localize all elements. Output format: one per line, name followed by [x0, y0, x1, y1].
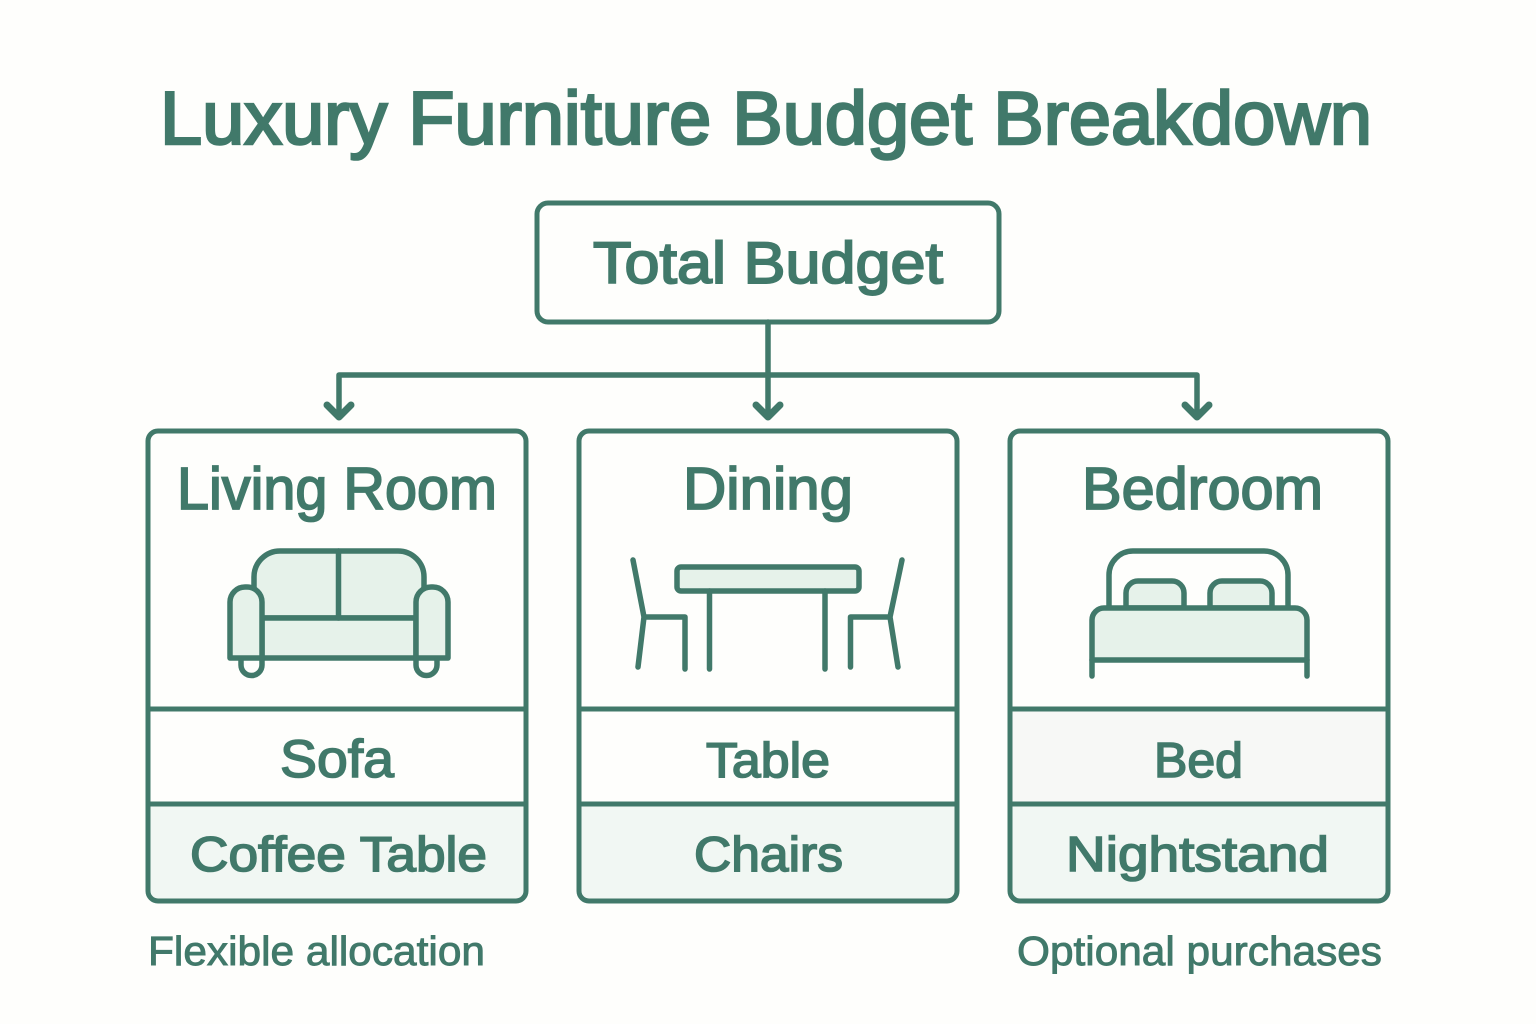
title: Luxury Furniture Budget Breakdown	[160, 76, 1372, 160]
item: coffee table: Coffee Table	[190, 828, 487, 882]
heading: bedroom: Bedroom	[1082, 456, 1323, 522]
note: optional purchases: Optional purchases	[1017, 928, 1382, 974]
item: table: Table	[706, 734, 830, 788]
panel: living room	[148, 431, 526, 901]
heading: dining: Dining	[683, 456, 853, 522]
panel: bedroom	[1010, 431, 1388, 901]
note: flexible allocation: Flexible allocation	[148, 928, 485, 974]
icon: table and chairs	[633, 560, 902, 669]
item: sofa: Sofa	[280, 730, 395, 789]
heading: living room: Living Room	[177, 456, 497, 522]
total budget box: Total Budget	[593, 231, 943, 296]
total budget box	[537, 203, 999, 322]
item: nightstand: Nightstand	[1066, 828, 1329, 882]
icon: bed	[1092, 551, 1307, 676]
item: chairs: Chairs	[694, 828, 843, 882]
connector arrows	[327, 322, 1209, 417]
item: bed: Bed	[1154, 734, 1243, 788]
icon: sofa	[230, 551, 448, 676]
panel: dining	[579, 431, 957, 901]
